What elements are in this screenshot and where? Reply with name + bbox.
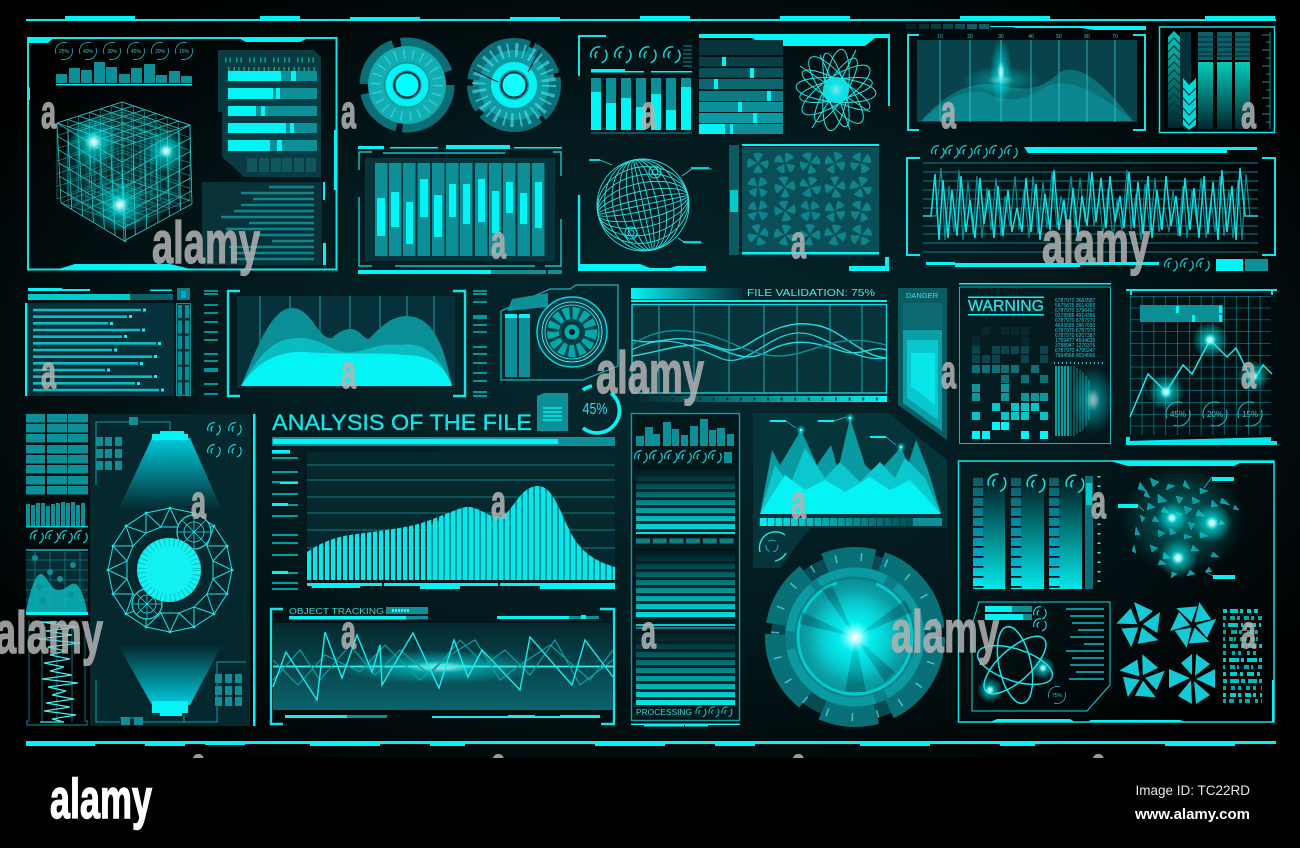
- progress bars panel: [218, 50, 321, 177]
- number columns: 7694568 6034566: [1055, 353, 1096, 359]
- particle cloud: [1118, 466, 1245, 579]
- percentage gauges: [55, 42, 193, 60]
- blade star icons: [1112, 592, 1227, 710]
- horizontal bars panel: [202, 182, 326, 265]
- watermark: small a marks: a: [1091, 737, 1106, 790]
- watermark: small a marks: a: [491, 215, 506, 268]
- icon: wire cube: [57, 102, 192, 242]
- watermark: large alamy marks: alamy: [0, 600, 103, 666]
- footer image id: Image ID: TC22RD: [1135, 783, 1250, 798]
- percentage gauges: 40%: [83, 49, 94, 55]
- tick column right: [473, 291, 487, 396]
- number columns: 6787970 3683587: [1055, 298, 1096, 304]
- panel: tall sphere scanner: [90, 414, 250, 726]
- watermark: small a marks: a: [1241, 85, 1256, 138]
- panel: layered area chart: [228, 291, 465, 396]
- panel: lab console: [958, 461, 1274, 722]
- bar envelope: [430, 486, 615, 580]
- axis lines and labels: [940, 40, 1115, 122]
- panel: danger: DANGER: [906, 291, 939, 300]
- gradient columns: [973, 474, 1099, 589]
- icon: fan gadget: [501, 285, 618, 380]
- watermark: small a marks: a: [1241, 345, 1256, 398]
- panel: danger: [898, 288, 947, 440]
- processing label: PROCESSING: [636, 708, 692, 717]
- sine traces: [632, 324, 886, 360]
- mini bars: [636, 419, 734, 446]
- percentage dials: 45%: [1170, 410, 1186, 419]
- panel: candlestick chart: [358, 145, 562, 274]
- panel: processing: [631, 414, 740, 726]
- light beams: [118, 438, 222, 510]
- watermark: small a marks: a: [941, 85, 956, 138]
- percentage gauges: 15%: [179, 49, 190, 55]
- watermark: small a marks: a: [791, 215, 806, 268]
- panel: spectrum area chart: 30: [998, 34, 1004, 40]
- top border bar: [26, 16, 1276, 21]
- cell table: [26, 414, 88, 494]
- panel: file list: [25, 288, 190, 396]
- glow: [961, 38, 1041, 106]
- number columns: 6787970 3796467: [1055, 308, 1096, 314]
- percentage dials: 20%: [1207, 410, 1223, 419]
- chart: radial dial left: [364, 42, 450, 128]
- mountain layers: [921, 70, 1133, 121]
- number columns: 6787970 6207387: [1055, 333, 1096, 339]
- panel: spectrum area chart: 70: [1112, 34, 1118, 40]
- gauge: [759, 532, 786, 561]
- chevron column: [1180, 32, 1191, 130]
- watermark: large alamy marks: alamy: [891, 599, 999, 665]
- heading: FILE VALIDATION: 75%: [747, 287, 875, 299]
- fading squares strip: [631, 288, 743, 299]
- mini bars: [26, 502, 88, 528]
- light band: [335, 650, 545, 684]
- percentage gauges: 45%: [131, 49, 142, 55]
- panel: file validation: [631, 287, 887, 402]
- panel: analysis chart: [272, 437, 615, 589]
- mini bar chart: [56, 62, 192, 86]
- circuit lines: [96, 422, 246, 722]
- zigzag traces: [273, 640, 613, 685]
- watermark: large alamy marks: alamy: [596, 340, 704, 406]
- panel: warning: [959, 283, 1115, 444]
- row sliders: [699, 40, 783, 134]
- watermark: small a marks: a: [1091, 475, 1106, 528]
- level squares: [631, 396, 887, 402]
- panel: spectrum area chart: 10: [937, 34, 943, 40]
- warning heading: WARNING: [968, 298, 1044, 315]
- vertical bars: [591, 78, 692, 134]
- tick labels: [272, 453, 298, 589]
- watermark: small a marks: a: [1241, 605, 1256, 658]
- noise trace: [27, 621, 87, 725]
- panel: waveform: [907, 146, 1275, 271]
- panel: spectrum area chart: 60: [1084, 34, 1090, 40]
- tick column left: [204, 291, 218, 394]
- stacked bars: [1198, 32, 1250, 129]
- gauges: [31, 531, 87, 543]
- bottom border bar: [26, 741, 1276, 746]
- watermark: small a marks: a: [791, 737, 806, 790]
- number columns: 6787970 4790247: [1055, 348, 1096, 354]
- number columns: 9378586 4914366: [1055, 313, 1096, 319]
- percentage gauges: 25%: [59, 49, 70, 55]
- watermark: small a marks: a: [491, 475, 506, 528]
- rays: [800, 585, 912, 692]
- icon: document: [537, 393, 568, 431]
- watermark: small a marks: a: [341, 605, 356, 658]
- watermark: small a marks: a: [41, 345, 56, 398]
- number columns: 4693689 3967650: [1055, 323, 1096, 329]
- footer logo: alamy: [50, 767, 152, 830]
- atom panel: [972, 602, 1110, 711]
- gauge row: [591, 47, 680, 63]
- panel: spectrum area chart: 40: [1028, 34, 1034, 40]
- heading: analysis of the file: ANALYSIS OF THE FILE: [272, 410, 532, 435]
- watermark: small a marks: a: [191, 475, 206, 528]
- watermark: small a marks: a: [341, 345, 356, 398]
- small button grids: [96, 437, 242, 706]
- panel: gauges, rows and spirograph: [579, 34, 890, 134]
- watermark: small a marks: a: [341, 85, 356, 138]
- panel: wire sphere: [578, 150, 889, 271]
- atom panel: 75%: [1052, 693, 1063, 699]
- watermark: large alamy marks: alamy: [152, 210, 260, 276]
- panel: left sidebar: [26, 414, 88, 725]
- chart: radar glow: [771, 553, 939, 721]
- gradient bars block: [1056, 366, 1115, 436]
- panel: spectrum area chart: 20: [967, 34, 973, 40]
- percentage dials: [1166, 402, 1262, 426]
- pixel matrix: [972, 327, 1048, 439]
- icon: network sphere: [108, 508, 232, 632]
- watermark: small a marks: a: [641, 605, 656, 658]
- panel: mountain chart: [753, 413, 947, 568]
- footer url: www.alamy.com: [1134, 806, 1250, 823]
- small area chart: [26, 549, 88, 615]
- number columns: 6787970 6787970: [1055, 318, 1096, 324]
- number columns: 3788947 1270376: [1055, 343, 1096, 349]
- vertical divider: [253, 414, 256, 726]
- panel: pinwheel grid: [729, 144, 879, 255]
- gauges: [635, 451, 732, 463]
- number columns: 1759477 4594635: [1055, 338, 1096, 344]
- number columns: [1055, 298, 1096, 359]
- panel: spectrum area chart: 50: [1056, 34, 1062, 40]
- panel: object tracking: OBJECT TRACKING: [289, 606, 384, 616]
- chart: radial dial right: [473, 44, 555, 126]
- signal trace: [923, 168, 1258, 240]
- list lines: [33, 310, 159, 390]
- panel: spectrum area chart: [906, 24, 1146, 130]
- icon: atom: [973, 624, 1057, 706]
- pixel noise strip: [1223, 611, 1262, 701]
- gauge: 45 percent: [582, 386, 619, 433]
- panel: object tracking: [271, 606, 614, 724]
- panel: grid line chart: [1126, 289, 1277, 445]
- striped blocks: [636, 468, 735, 705]
- percentage gauges: 20%: [155, 49, 166, 55]
- watermark: small a marks: a: [191, 737, 206, 790]
- panel frame: [28, 38, 336, 270]
- watermark: small a marks: [41, 85, 1256, 790]
- watermark: small a marks: a: [491, 737, 506, 790]
- watermark: small a marks: a: [41, 85, 56, 138]
- level strip: [759, 518, 942, 526]
- panel: ruler and chevrons: [1160, 27, 1274, 132]
- watermark: large alamy marks: [0, 210, 1150, 666]
- percentage dials: 15%: [1242, 410, 1258, 419]
- watermark: large alamy marks: alamy: [1042, 210, 1150, 276]
- icon: spirograph: [795, 48, 877, 132]
- number columns: 5675875 8014365: [1055, 303, 1096, 309]
- watermark: small a marks: a: [641, 85, 656, 138]
- number columns: 6787970 6787970: [1055, 328, 1096, 334]
- panel: cube: [27, 37, 337, 270]
- gauge: 45 percent: 45%: [582, 401, 608, 418]
- percentage gauges: 30%: [107, 49, 118, 55]
- watermark: small a marks: a: [791, 475, 806, 528]
- footer band: [0, 758, 1300, 848]
- icon: wire globe: [588, 150, 698, 260]
- watermark: small a marks: a: [941, 345, 956, 398]
- line series: [1130, 340, 1272, 417]
- peak markers: [770, 413, 906, 452]
